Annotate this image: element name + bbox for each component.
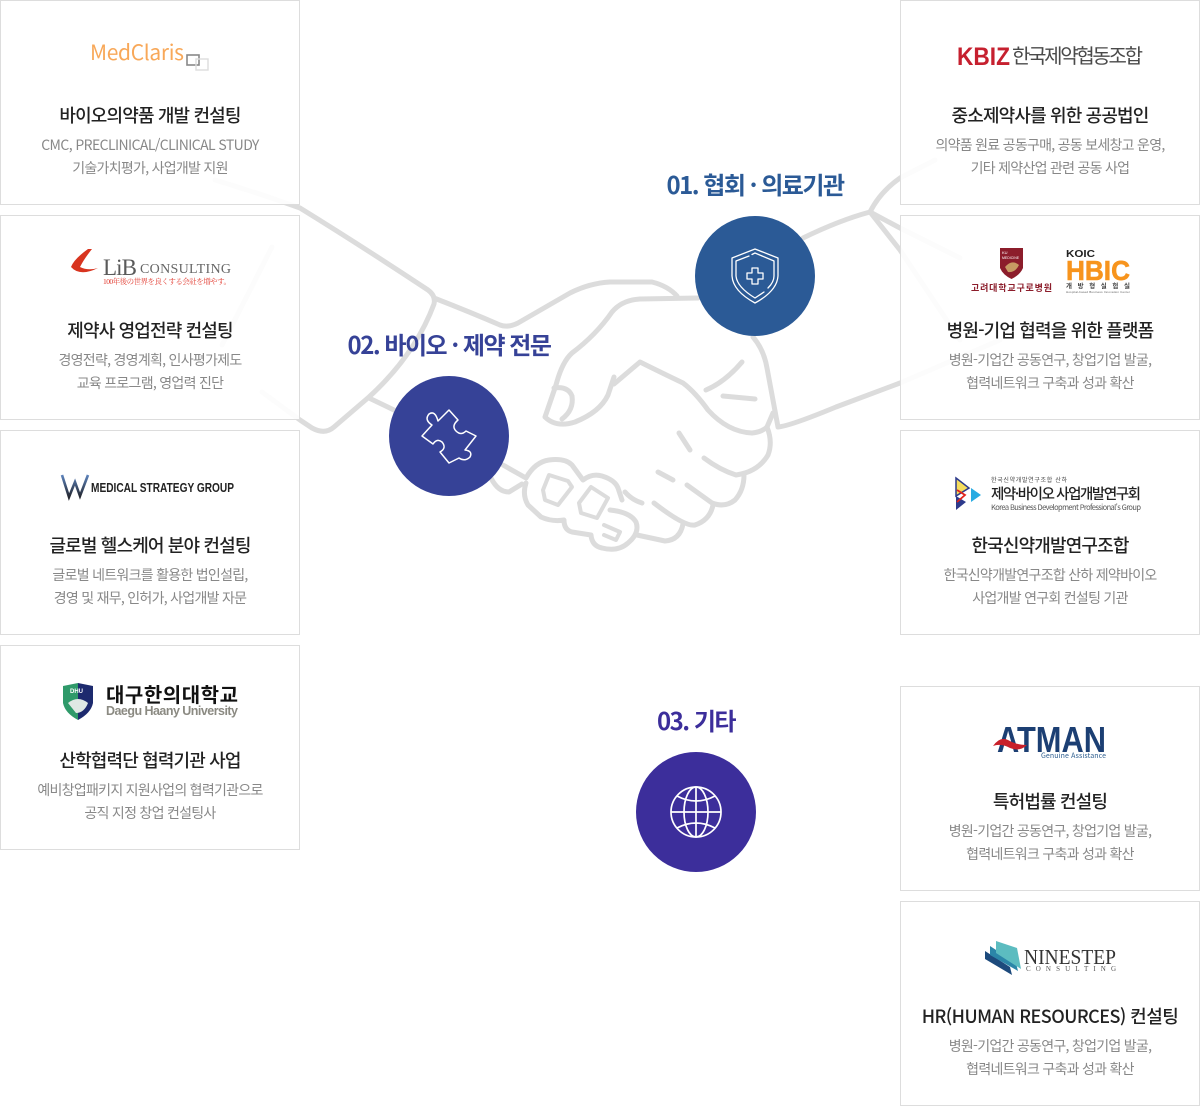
logo: Medical Strategy Group	[60, 474, 234, 501]
logo: Medical Strategy Group: MEDICAL STRATEGY GROUP	[91, 480, 234, 495]
card: Korea Business Development Professional's Group	[900, 430, 1200, 635]
card description: 기타 제약산업 관련 공동 사업	[971, 158, 1129, 178]
card description	[37, 780, 263, 823]
card title: 중소제약사를 위한 공공법인	[952, 102, 1148, 128]
card description	[52, 565, 248, 608]
card title: 산학협력단 협력기관 사업	[59, 747, 241, 773]
card description: 협력네트워크 구축과 성과 확산	[966, 844, 1134, 864]
logo: KU Medicine and HBIC: KU	[1002, 250, 1008, 255]
card title: 한국신약개발연구조합	[971, 532, 1129, 558]
card description: 병원-기업간 공동연구, 창업기업 발굴,	[949, 821, 1151, 841]
card: ATMAN	[900, 686, 1200, 891]
card description: 예비창업패키지 지원사업의 협력기관으로	[37, 780, 263, 800]
card description	[949, 1036, 1152, 1079]
card description: 사업개발 연구회 컨설팅 기관	[972, 588, 1128, 608]
logo: NINESTEP	[985, 941, 1116, 975]
heading: 01: 01. 협회 · 의료기관	[666, 166, 844, 201]
logo: Daegu Haany University	[63, 679, 238, 720]
logo: Korea Business Development group: 한국신약개발연구조합 산하	[991, 475, 1067, 484]
icon: shield circle	[695, 216, 815, 336]
card title: HR(HUMAN RESOURCES) 컨설팅	[922, 1003, 1178, 1029]
card description: 경영전략, 경영계획, 인사평가제도	[58, 350, 242, 370]
card description: 협력네트워크 구축과 성과 확산	[966, 373, 1134, 393]
card description: 공직 지정 창업 컨설팅사	[84, 803, 216, 823]
logo: Daegu Haany University: 대구한의대학교	[106, 679, 238, 708]
card description	[943, 565, 1157, 608]
logo: MedClaris	[90, 37, 209, 71]
card: KU Medicine and HBIC	[900, 215, 1200, 420]
icon: puzzle circle	[389, 376, 509, 496]
card description	[41, 135, 260, 178]
logo: Daegu Haany University: DHU	[70, 689, 83, 695]
card description	[949, 350, 1152, 393]
card: Daegu Haany University	[0, 645, 300, 850]
logo: LiB Consulting: LiB	[103, 255, 137, 280]
card description: 한국신약개발연구조합 산하 제약바이오	[943, 565, 1157, 585]
card description: 병원-기업간 공동연구, 창업기업 발굴,	[949, 1036, 1151, 1056]
logo: KU Medicine and HBIC	[971, 248, 1130, 294]
logo: LiB Consulting: 100年後の世界を良くする会社を増やす。	[103, 276, 231, 286]
card: KBIZ	[900, 0, 1200, 205]
card: MedClaris	[0, 0, 300, 205]
card: NINESTEP	[900, 901, 1200, 1106]
logo: ATMAN: ATMAN	[997, 719, 1106, 760]
logo: Korea Business Development group: Korea Business Development Professional's Group	[991, 502, 1141, 513]
card description: 경영 및 재무, 인허가, 사업개발 자문	[54, 588, 246, 608]
logo: KU Medicine and HBIC: HBIC	[1066, 255, 1130, 286]
logo: LiB Consulting	[71, 249, 231, 286]
card description: 의약품 원료 공동구매, 공동 보세창고 운영,	[935, 135, 1165, 155]
card description: 글로벌 네트워크를 활용한 법인설립,	[52, 565, 248, 585]
logo: NINESTEP: NINESTEP	[1024, 945, 1116, 969]
card title: 병원-기업 협력을 위한 플랫폼	[947, 317, 1153, 343]
logo: KBIZ: KBIZ	[957, 43, 1010, 71]
card description	[935, 135, 1165, 178]
logo: KBIZ	[957, 40, 1143, 71]
heading: 03: 03. 기타	[657, 702, 735, 737]
card title: 특허법률 컨설팅	[993, 788, 1107, 814]
logo: KU Medicine and HBIC: Hospital-based Business Innovation Center	[1066, 290, 1130, 294]
card: LiB Consulting	[0, 215, 300, 420]
card description: CMC, PRECLINICAL/CLINICAL STUDY	[41, 135, 259, 155]
card description	[949, 821, 1152, 864]
logo: KU Medicine and HBIC: MEDICINE	[1002, 256, 1020, 260]
card title: 바이오의약품 개발 컨설팅	[59, 102, 241, 128]
logo: Korea Business Development group	[955, 475, 1141, 513]
card title: 제약사 영업전략 컨설팅	[67, 317, 233, 343]
logo: KU Medicine and HBIC: 개 방 형 실 험 실	[1066, 280, 1130, 290]
logo: Korea Business Development group: 제약·바이오 사업개발연구회	[991, 483, 1141, 504]
card: Medical Strategy Group	[0, 430, 300, 635]
card description: 협력네트워크 구축과 성과 확산	[966, 1059, 1134, 1079]
logo: KU Medicine and HBIC: 고려대학교구로병원	[971, 281, 1052, 294]
logo: MedClaris: MedClaris	[90, 37, 184, 67]
logo: LiB Consulting: CONSULTING	[140, 262, 231, 277]
logo: NINESTEP: CONSULTING	[1026, 965, 1116, 973]
card title: 글로벌 헬스케어 분야 컨설팅	[49, 532, 251, 558]
heading: 02: 02. 바이오 · 제약 전문	[348, 326, 550, 361]
card description: 병원-기업간 공동연구, 창업기업 발굴,	[949, 350, 1151, 370]
logo: KU Medicine and HBIC: KOIC	[1066, 249, 1095, 260]
logo: Daegu Haany University: Daegu Haany University	[106, 704, 238, 718]
card description: 교육 프로그램, 영업력 진단	[77, 373, 223, 393]
logo: KBIZ: 한국제약협동조합	[1012, 40, 1143, 69]
card description	[58, 350, 242, 393]
logo: ATMAN: Genuine Assistance	[1041, 751, 1106, 761]
icon: globe circle	[636, 752, 756, 872]
card description: 기술가치평가, 사업개발 지원	[72, 158, 228, 178]
